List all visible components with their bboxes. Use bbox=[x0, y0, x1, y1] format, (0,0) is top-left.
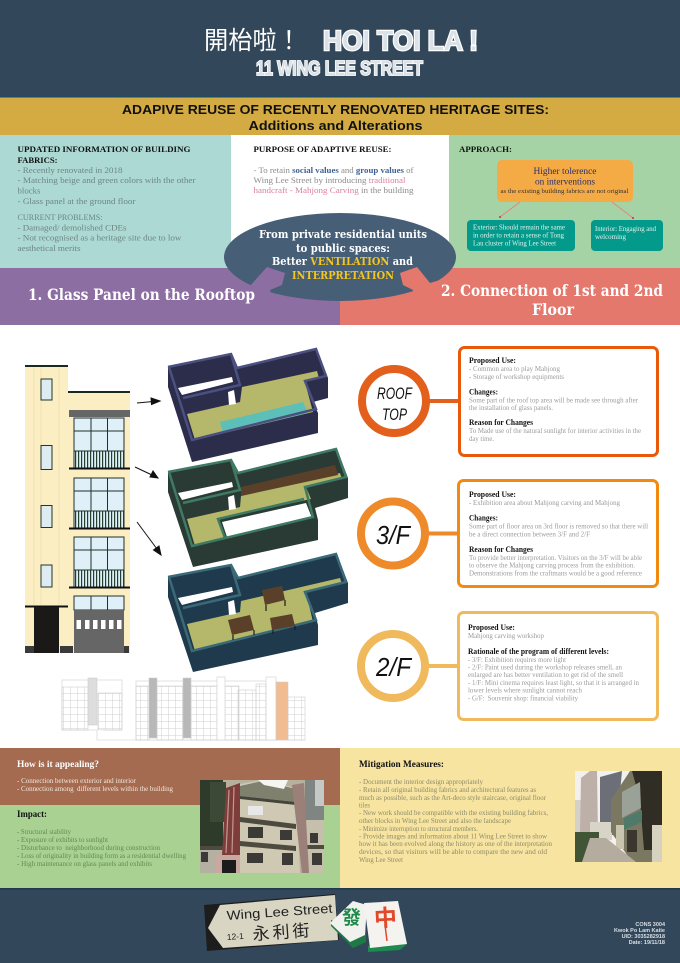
info box: 3/F: Reason for Changes bbox=[469, 545, 533, 554]
panel: mitigation measures: much as possible, such as the Art-deco style staircase, original floor bbox=[359, 793, 546, 802]
header band bbox=[0, 0, 680, 98]
street sign bbox=[204, 894, 339, 951]
panel: impact bbox=[0, 805, 340, 888]
info box: roof top: Proposed Use: bbox=[469, 356, 516, 365]
panel: mitigation measures: other blocks in Wing Lee Street and also the landscape bbox=[359, 816, 512, 825]
credits: Date: 19/11/18 bbox=[629, 940, 665, 946]
approach: exterior box: Lau cluster of Wing Lee Street bbox=[473, 240, 556, 248]
credits: Kwok Po Lam Katie bbox=[614, 928, 665, 934]
floor badge: 2/F bbox=[361, 634, 458, 698]
panel: impact: - Structural stability bbox=[17, 827, 71, 836]
panel: mitigation measures: how it has been evolved along the history as one of the interpretation bbox=[359, 839, 552, 848]
panel: mitigation measures: Wing Lee Street bbox=[359, 855, 404, 864]
banner background: purple bbox=[0, 268, 340, 325]
panel: approach: APPROACH: bbox=[459, 145, 512, 154]
approach: interior box: welcoming bbox=[595, 233, 626, 241]
info box: roof top: - Common area to play Mahjong bbox=[469, 365, 560, 373]
isometric plan: 2/F bbox=[168, 554, 348, 672]
info box: 2/F: - 3/F: Exhibition requires more light bbox=[468, 656, 566, 664]
title: Hoi Toi La: HOI TOI LA ! bbox=[323, 25, 478, 56]
info box: 3/F: to observe the Mahjong carving process from the exhibition. bbox=[469, 562, 635, 570]
callout: central ellipse: From private residential units bbox=[259, 227, 427, 241]
panel: how is it appealing: - Connection between exterior and interior bbox=[17, 776, 136, 785]
floor badge: roof top bbox=[362, 369, 458, 433]
panel: impact: - Loss of originality in building form as a residential dwelling bbox=[17, 851, 186, 860]
photo: building exterior bbox=[200, 780, 324, 873]
banner background: salmon bbox=[340, 268, 680, 325]
floor slabs bbox=[25, 468, 130, 608]
panel: updated information: blocks bbox=[18, 186, 40, 196]
panel: updated information: - Recently renovated in 2018 bbox=[18, 165, 122, 175]
panel: mitigation measures bbox=[340, 748, 680, 888]
info box: 3/F: Demonstrations from the craftmans would be a good reference bbox=[469, 570, 642, 578]
info box: roof top: To Made use of the natural sunlight for interior activities in the bbox=[469, 427, 641, 435]
info box: 2/F: - 2/F: Paint used during the workshop releases smell, an bbox=[468, 664, 622, 672]
panel: mitigation measures: Mitigation Measures: bbox=[359, 760, 444, 770]
panel: purpose of adaptive reuse: Wing Lee Street by introducing traditional bbox=[254, 175, 406, 185]
isometric plan: roof top bbox=[168, 349, 328, 462]
side windows bbox=[41, 379, 52, 587]
approach: interior box: Interior: Engaging and bbox=[595, 225, 656, 233]
floor badge: 2/F: 2/F bbox=[375, 652, 413, 682]
credits bbox=[614, 922, 666, 946]
panel: mitigation measures: - Provide images and information about 11 Wing Lee Street to show bbox=[359, 832, 548, 840]
approach: connector lines bbox=[499, 202, 634, 219]
photo: Wing Lee Street bbox=[575, 771, 662, 862]
panel: impact: - High maintenance on glass panels and exhibits bbox=[17, 859, 152, 868]
credits: CONS 3004 bbox=[635, 922, 666, 928]
arrow: purple bbox=[240, 267, 285, 300]
tables bbox=[228, 586, 295, 635]
street sign: 永利街 bbox=[252, 916, 310, 945]
info box: 2/F: enlarged are has better ventilation to get rid of the smell bbox=[468, 671, 623, 679]
info box: 3/F: Changes: bbox=[469, 514, 498, 522]
ground floor door bbox=[34, 607, 59, 653]
approach: exterior box bbox=[467, 220, 575, 251]
panel: how is it appealing: - Connection among different levels within the building bbox=[17, 784, 173, 793]
approach: exterior box: in order to retain a sense of Tong bbox=[473, 232, 564, 240]
heading line 1: ADAPIVE REUSE OF RECENTLY RENOVATED HERITAGE SITES: bbox=[122, 102, 549, 117]
info box: 2/F: - 1/F: Mini cinema requires least light, so that it is arranged in bbox=[468, 679, 639, 687]
info box: 2/F: Mahjong carving workshop bbox=[468, 632, 544, 640]
info box: 3/F: Proposed Use: bbox=[469, 490, 516, 499]
building facade elevation bbox=[25, 365, 130, 653]
floor badge: roof top: ROOF bbox=[377, 384, 413, 403]
callout: central ellipse bbox=[224, 213, 456, 301]
panel: updated information: - Matching beige and green colors with the other bbox=[18, 175, 196, 185]
banner heading: connection of 1st and 2nd floor bbox=[441, 281, 663, 319]
gold heading band bbox=[0, 98, 680, 136]
panel: updated information: - Glass panel at the ground floor bbox=[18, 196, 136, 206]
panel: updated information: aesthetical merits bbox=[18, 243, 80, 253]
approach: exterior box: Exterior: Should remain the same bbox=[473, 224, 565, 232]
street sign: Wing Lee Street bbox=[226, 901, 333, 923]
arrows to floor plans bbox=[135, 398, 161, 555]
info box: roof top: the installation of glass panels. bbox=[469, 404, 553, 412]
panel: updated information bbox=[0, 135, 231, 268]
street elevation line drawing bbox=[62, 677, 305, 740]
info box: 3/F: be a direct connection between 3/F and 2/F bbox=[469, 530, 590, 538]
main windows bbox=[74, 418, 124, 610]
panel: updated information: FABRICS: bbox=[18, 156, 58, 165]
info box: roof top: - Storage of workshop equipments bbox=[469, 373, 564, 381]
panel: how is it appealing: How is it appealing? bbox=[17, 760, 99, 770]
panel: updated information: CURRENT PROBLEMS: bbox=[18, 212, 102, 222]
panel: purpose of adaptive reuse: - To retain social values and group values of bbox=[254, 165, 414, 175]
panel: impact: - Exposure of exhibits to sunlight bbox=[17, 835, 109, 844]
railings bbox=[74, 451, 124, 587]
mahjong tiles bbox=[330, 898, 407, 952]
floor badge: 3/F: 3/F bbox=[376, 520, 412, 550]
info box: 2/F: - G/F: Souvenir shop: financial viability bbox=[468, 694, 578, 702]
heading line 2: Additions and Alterations bbox=[248, 118, 422, 133]
panel: updated information: UPDATED INFORMATION OF BUILDING bbox=[18, 145, 190, 154]
approach: higher tolerence box bbox=[497, 160, 633, 202]
callout: central ellipse: INTERPRETATION bbox=[292, 268, 394, 282]
info box: 2/F: Rationale of the program of different levels: bbox=[468, 647, 609, 656]
ground floor shutter bbox=[74, 610, 124, 653]
panel: impact: Impact: bbox=[17, 810, 47, 820]
approach: higher tolerence box: on interventions bbox=[535, 178, 595, 188]
info box: 3/F: To provide better interpretation. Visitors on the 3/F will be able bbox=[469, 554, 642, 562]
panel: purpose of adaptive reuse: PURPOSE OF ADAPTIVE REUSE: bbox=[254, 145, 392, 154]
panel: how is it appealing bbox=[0, 748, 340, 805]
subtitle: 11 WING LEE STREET bbox=[256, 58, 423, 80]
info box: roof top: Reason for Changes bbox=[469, 418, 533, 427]
street sign: 12-1 bbox=[226, 931, 244, 942]
isometric plan: 3/F bbox=[168, 449, 348, 567]
panel: purpose of adaptive reuse bbox=[231, 135, 449, 268]
info box: 3/F: Some part of floor area on 3rd floor is removed so that there will bbox=[469, 522, 648, 530]
panel: approach bbox=[449, 135, 680, 268]
panel: mitigation measures: tiles bbox=[359, 800, 370, 810]
credits: UID: 3035282918 bbox=[622, 934, 665, 940]
info box: roof top: Some part of the roof top area will be made see through after bbox=[469, 396, 639, 404]
floor badge: roof top: TOP bbox=[382, 405, 407, 424]
panel: purpose of adaptive reuse: handcraft - Mahjong Carving in the building bbox=[254, 185, 414, 195]
approach: interior box bbox=[591, 220, 663, 251]
panel: updated information: - Damaged/ demolished CDEs bbox=[18, 222, 126, 232]
info box: 3/F bbox=[458, 480, 658, 586]
info box: 2/F: lower levels where sunlight cannot reach bbox=[468, 686, 582, 694]
footer band bbox=[0, 888, 680, 963]
panel: mitigation measures: - New work should be compatible with the existing building fabrics, bbox=[359, 808, 548, 817]
mahjong tiles: 發 bbox=[342, 903, 361, 930]
banner heading: glass panel on the rooftop: 1. Glass Panel on the Rooftop bbox=[28, 285, 255, 304]
floor badge: 3/F bbox=[361, 502, 458, 566]
arrow: salmon bbox=[400, 267, 440, 300]
callout: central ellipse: to public spaces: bbox=[296, 241, 390, 255]
banner heading: connection of 1st and 2nd floor: Floor bbox=[532, 300, 575, 319]
info box: roof top bbox=[460, 348, 658, 456]
callout: central ellipse: Better VENTILATION and bbox=[272, 254, 413, 268]
panel: mitigation measures: - Retain all original building fabrics and architectural features as bbox=[359, 785, 536, 794]
panel: mitigation measures: devices, so that visitors will be able to compare the new and old bbox=[359, 847, 547, 856]
info box: 2/F bbox=[458, 612, 658, 720]
approach: higher tolerence box: as the existing building fabrics are not original bbox=[500, 188, 629, 195]
info box: 2/F: Proposed Use: bbox=[468, 623, 515, 632]
panel: impact: - Disturbance to neighborhood during construction bbox=[17, 843, 160, 852]
panel: mitigation measures: - Minimize interruption to structural members. bbox=[359, 824, 478, 833]
mahjong tiles: 中 bbox=[373, 898, 398, 934]
panel: mitigation measures: - Document the interior design appropriately bbox=[359, 777, 483, 786]
title: Chinese: 開枱啦！ bbox=[204, 21, 301, 57]
approach: higher tolerence box: Higher tolerence bbox=[534, 167, 596, 177]
info box: 3/F: - Exhibition area about Mahjong carving and Mahjong bbox=[469, 499, 620, 507]
info box: roof top: day time. bbox=[469, 435, 494, 443]
info box: roof top: Changes: bbox=[469, 388, 498, 396]
panel: updated information: - Not recognised as a heritage site due to low bbox=[18, 232, 182, 242]
